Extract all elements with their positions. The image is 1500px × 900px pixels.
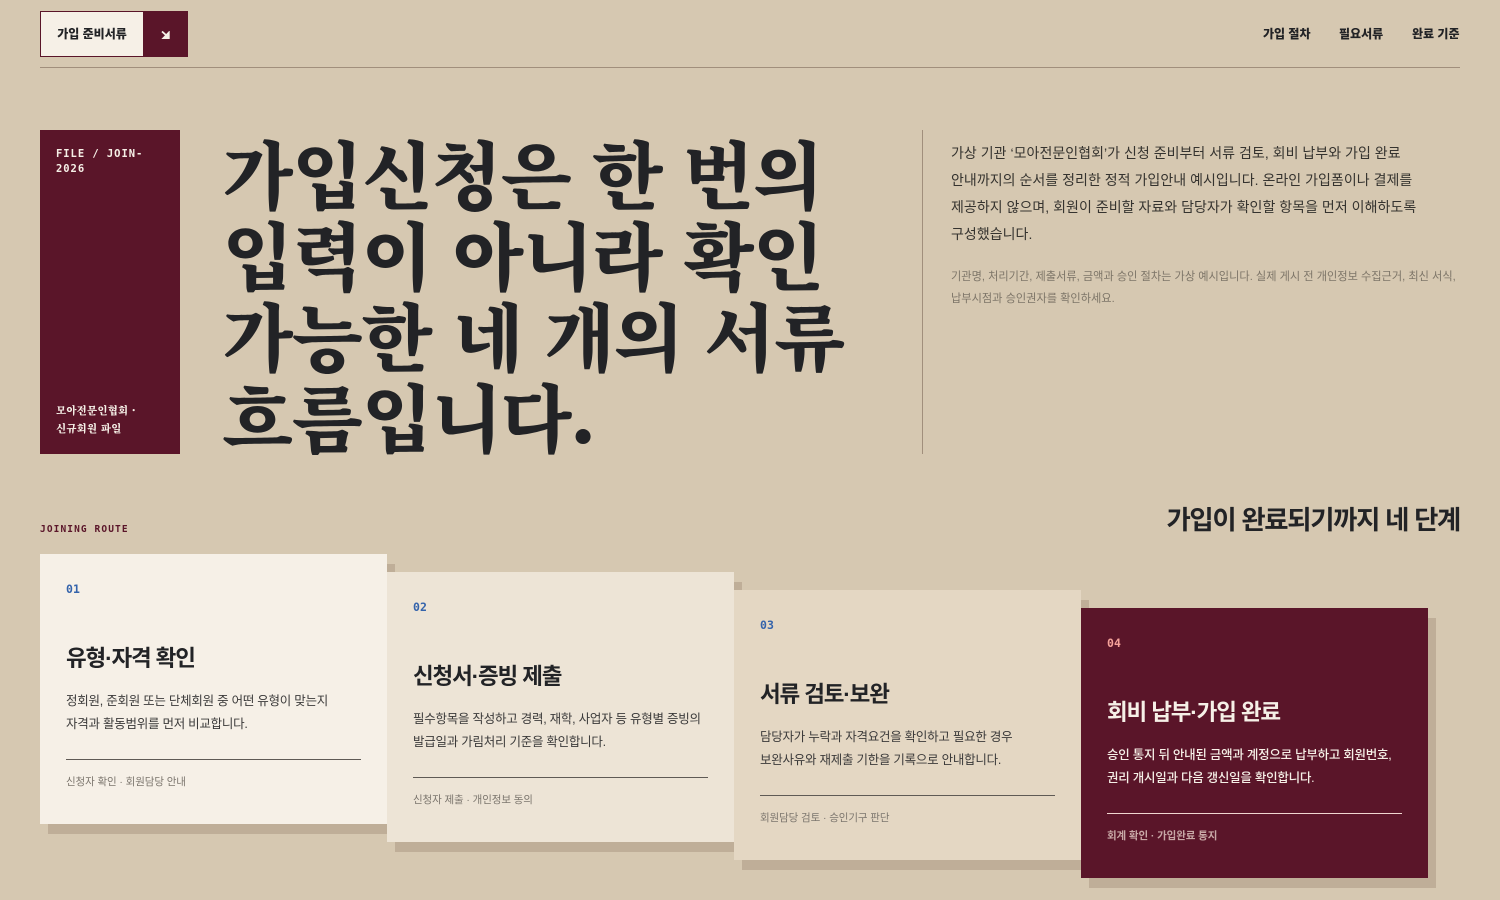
file caption: 모아전문인협회 · [56,403,136,418]
disclaimer: 기관명, 처리기간, 제출서류, 금액과 승인 절차는 가상 예시입니다. 실제 게시 전 개인정보 수집근거, 최신 서식, [951,271,1456,283]
button: 가입 준비서류 [40,11,188,57]
panel: step 3: 서류 검토·보완 [760,682,889,707]
title: 가능한 네 개의 서류 [222,281,844,387]
title: 가입신청은 한 번의 [222,119,822,225]
panel: step 4: 승인 통지 뒤 안내된 금액과 계정으로 납부하고 회원번호, [1107,748,1392,762]
disclaimer: 납부시점과 승인권자를 확인하세요. [951,293,1115,305]
panel: step 2: 신청자 제출 · 개인정보 동의 [413,794,533,806]
panel: step 1: 정회원, 준회원 또는 단체회원 중 어떤 유형이 맞는지 [66,694,328,708]
panel: step 3: 보완사유와 재제출 기한을 기록으로 안내합니다. [760,753,1001,767]
intro text: 제공하지 않으며, 회원이 준비할 자료와 담당자가 확인할 항목을 먼저 이해하도록 [951,199,1416,215]
file caption: 신규회원 파일 [56,421,122,436]
section heading: 가입이 완료되기까지 네 단계 [1166,505,1460,535]
section label: JOINING ROUTE [40,524,129,535]
panel: step 1: 자격과 활동범위를 먼저 비교합니다. [66,717,248,731]
panel: step 2: 02 [413,600,427,614]
panel: step 2: 발급일과 가림처리 기준을 확인합니다. [413,735,606,749]
panel: step 4: 04 [1107,636,1121,650]
panel: step 4: 회비 납부·가입 완료 [1107,700,1280,725]
title: 흐름입니다. [222,362,594,468]
title: 입력이 아니라 확인 [222,200,822,306]
panel: step 4: 회계 확인 · 가입완료 통지 [1107,830,1217,842]
panel: step 2: 신청서·증빙 제출 [413,664,561,689]
button label: 가입 준비서류 [57,27,127,41]
title [222,119,844,468]
panel: step 1: 01 [66,582,80,596]
button label [41,12,143,56]
icon: arrow [162,31,170,39]
panel: step 3: 03 [760,618,774,632]
file code: FILE / JOIN- [56,148,143,160]
panel: step 3: 회원담당 검토 · 승인기구 판단 [760,812,889,824]
panel: step 4: 권리 개시일과 다음 갱신일을 확인합니다. [1107,771,1314,785]
panel: step 3: 담당자가 누락과 자격요건을 확인하고 필요한 경우 [760,730,1012,744]
panel: step 4 [1081,608,1428,878]
panel: step 2 [387,572,734,842]
panel: step 1: 유형·자격 확인 [66,646,195,671]
panel: step 3 [734,590,1081,860]
navigation: 필요서류 [1339,27,1383,41]
navigation: 가입 절차 [1263,27,1310,41]
file caption [56,403,136,436]
intro text [951,145,1416,242]
intro text: 안내까지의 순서를 정리한 정적 가입안내 예시입니다. 온라인 가입폼이나 결제를 [951,172,1412,188]
panel: step 1 [40,554,387,824]
panel: step 2: 필수항목을 작성하고 경력, 재학, 사업자 등 유형별 증빙의 [413,712,701,726]
intro text: 가상 기관 ‘모아전문인협회’가 신청 준비부터 서류 검토, 회비 납부와 가입 완료 [951,145,1401,161]
disclaimer [951,270,1456,305]
file code [56,148,143,175]
panel: file tag [40,130,180,454]
navigation [1263,27,1460,41]
file code: 2026 [56,163,85,175]
panel: step 1: 신청자 확인 · 회원담당 안내 [66,776,186,788]
navigation: 완료 기준 [1412,27,1460,41]
intro text: 구성했습니다. [951,226,1032,242]
